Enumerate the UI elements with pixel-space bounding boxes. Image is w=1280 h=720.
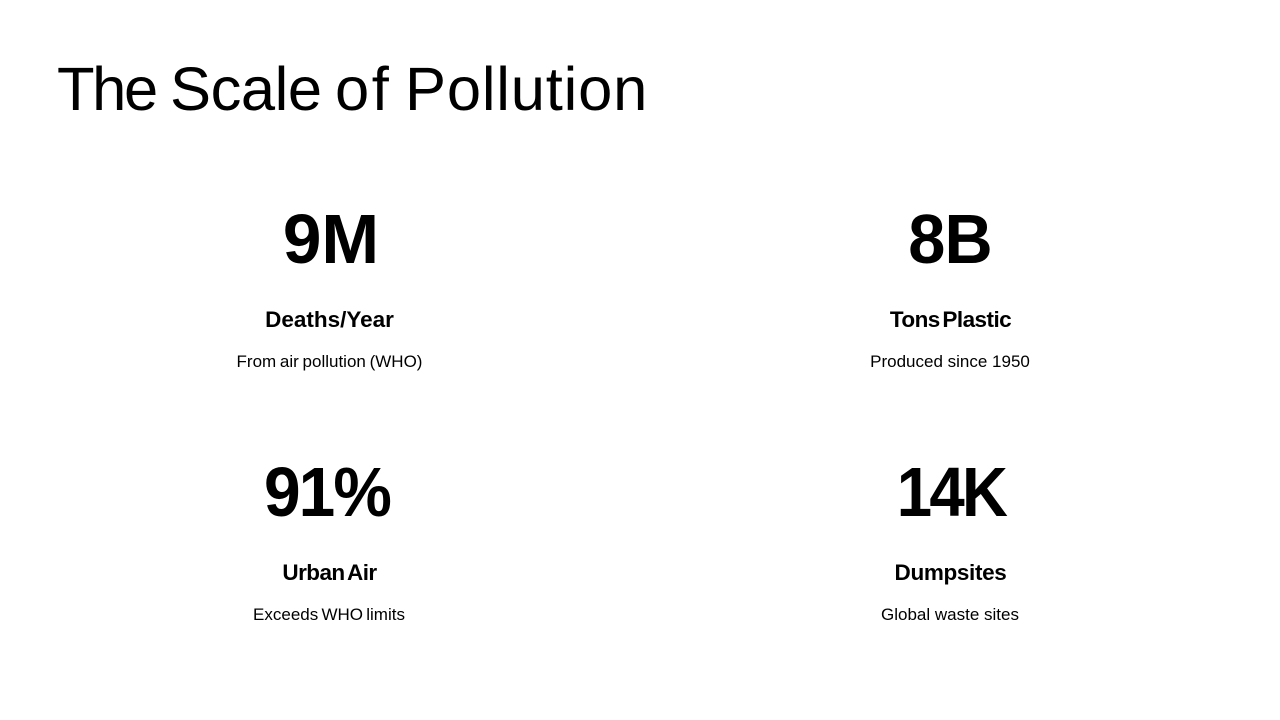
stat heading: Dumpsites: Dumpsites (895, 560, 1006, 585)
title: The (57, 55, 156, 124)
stat description: produced since 1950: Produced since 1950 (870, 352, 1030, 371)
panel: dumpsites (881, 453, 1019, 624)
stat number: 8B: 8B (908, 200, 992, 278)
stat heading: Urban Air: Urban Air (282, 560, 377, 585)
stat heading: Deaths/Year: Deaths/Year (265, 307, 394, 332)
title: of (335, 55, 391, 124)
stat description: exceeds WHO limits: Exceeds WHO limits (253, 605, 405, 624)
panel: deaths per year (237, 200, 422, 371)
stat number: 9M: 9M (282, 200, 379, 278)
title: Pollution (405, 55, 648, 124)
title: Scale (170, 55, 322, 124)
stat heading: Tons Plastic: Tons Plastic (890, 307, 1011, 332)
stat number: 14K: 14K (897, 453, 1005, 531)
stat description: from air pollution: From air pollution (WHO) (237, 352, 422, 371)
stat number: 91%: 91% (263, 453, 390, 531)
panel: urban air (253, 453, 405, 624)
title (57, 55, 648, 124)
stat description: global waste sites: Global waste sites (881, 605, 1019, 624)
panel: tons plastic (870, 200, 1030, 371)
